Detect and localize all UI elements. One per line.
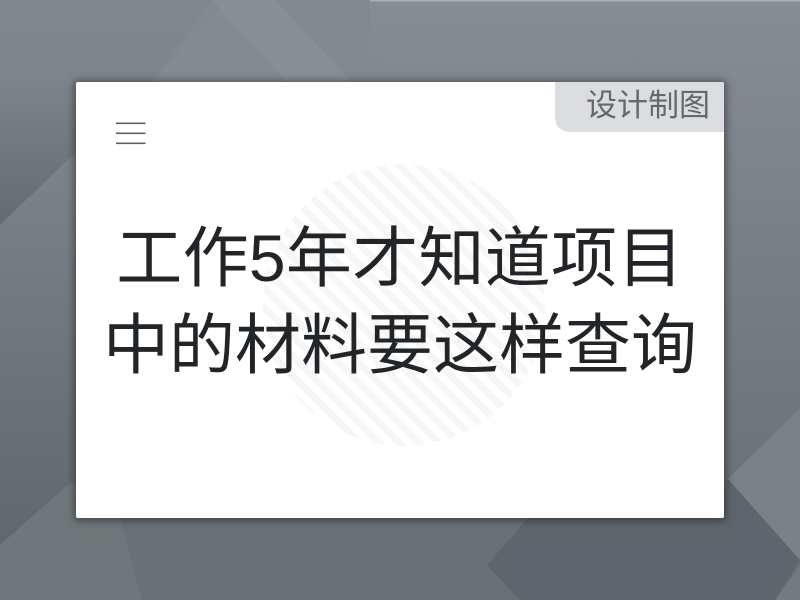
title bbox=[103, 221, 697, 382]
tab label: 设计制图 bbox=[555, 82, 724, 132]
title: 工作5年才知道项目 bbox=[116, 221, 684, 295]
menu icon bbox=[116, 122, 146, 144]
striped circle watermark bbox=[263, 164, 544, 446]
title: 中的材料要这样查询 bbox=[103, 308, 697, 382]
card bbox=[76, 82, 724, 518]
tab label: 设计制图: 设计制图 bbox=[586, 88, 710, 123]
